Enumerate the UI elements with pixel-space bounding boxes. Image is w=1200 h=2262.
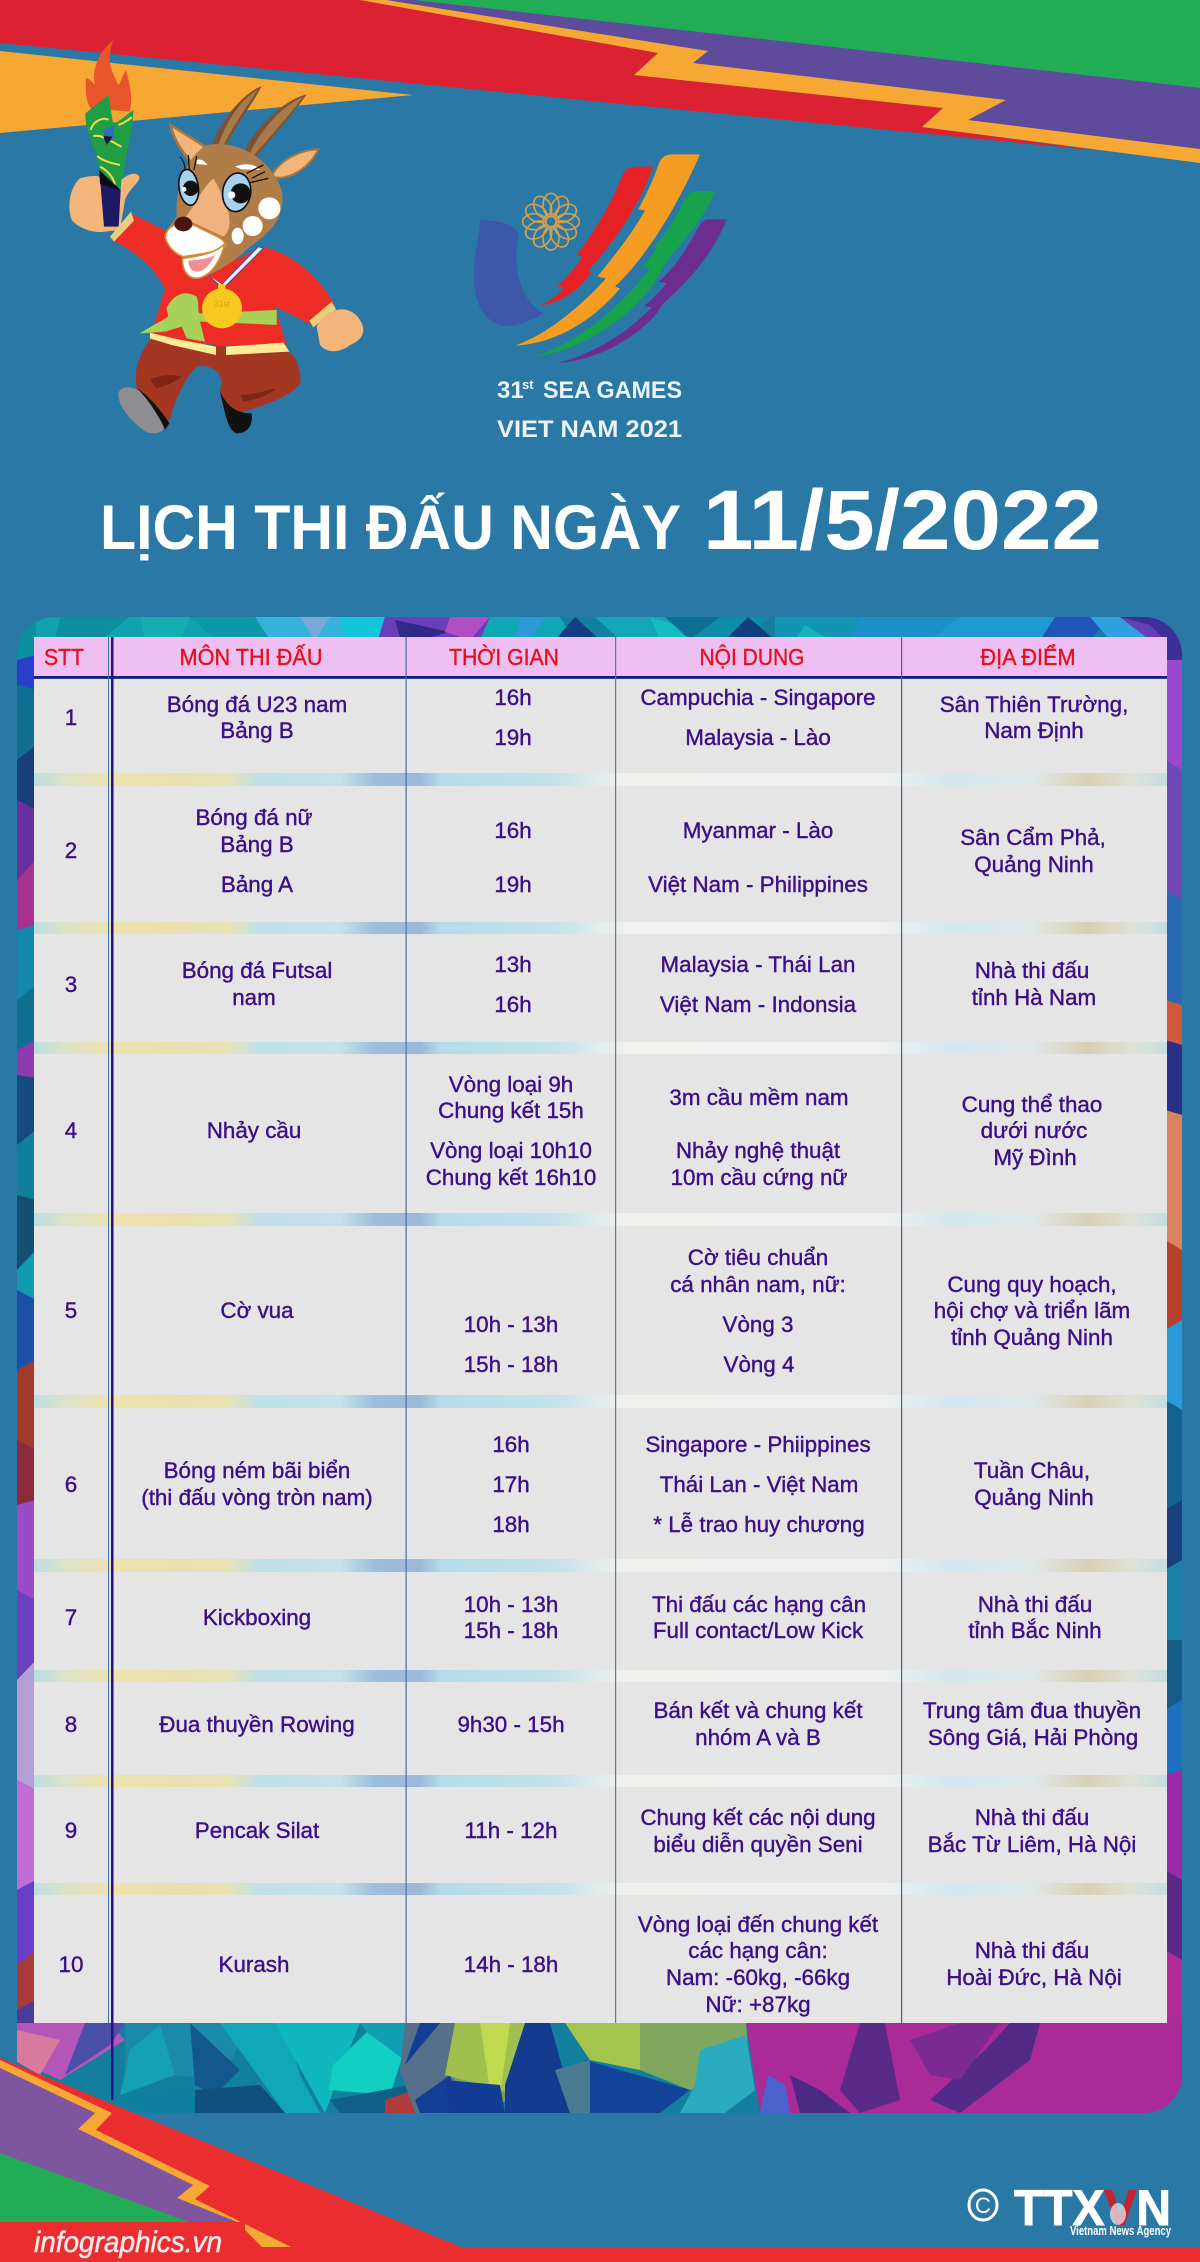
row 3: Việt Nam - Indonsia (660, 992, 857, 1017)
sash (140, 293, 277, 342)
table header labels (44, 643, 1076, 670)
title (100, 473, 1102, 567)
row 5: hội chợ và triển lãm (934, 1298, 1130, 1323)
muzzle (165, 223, 226, 257)
row 9: 9 (65, 1818, 77, 1843)
thick column rule in panel (111, 2023, 114, 2100)
row 5: Cờ tiêu chuẩn (688, 1245, 828, 1270)
row 10: 14h - 18h (464, 1952, 558, 1977)
medal: 31st (214, 300, 230, 309)
row 8 (65, 1698, 1141, 1750)
table background (34, 637, 1167, 2023)
agency name: Vietnam News Agency (1070, 2224, 1171, 2238)
row 1: Nam Định (984, 718, 1084, 743)
row 9: Chung kết các nội dung (640, 1805, 876, 1830)
logo text line 1: SEA GAMES (543, 377, 682, 404)
row 4: Chung kết 16h10 (426, 1165, 596, 1190)
row 4: 3m cầu mềm nam (669, 1085, 849, 1110)
row 4: Mỹ Đình (993, 1145, 1077, 1170)
table header background (34, 637, 1167, 676)
row 5: tỉnh Quảng Ninh (951, 1325, 1113, 1350)
row 1: 16h (494, 685, 532, 710)
table header labels: STT (44, 644, 84, 670)
row 7: Nhà thi đấu (978, 1592, 1092, 1617)
row 8: nhóm A và B (695, 1725, 821, 1750)
copyright symbol: C (975, 2193, 991, 2218)
row 4: Cung thể thao (962, 1092, 1102, 1117)
table header labels: NỘI DUNG (700, 643, 804, 670)
row 1: Sân Thiên Trường, (940, 692, 1128, 717)
logo: TTXVN news agency (969, 2180, 1171, 2238)
row 5: cá nhân nam, nữ: (670, 1272, 846, 1297)
row 3: tỉnh Hà Nam (972, 985, 1096, 1010)
row 6: Bóng ném bãi biển (164, 1458, 350, 1483)
row 8: Sông Giá, Hải Phòng (928, 1725, 1138, 1750)
row 5: Vòng 3 (723, 1312, 793, 1337)
row 8: 9h30 - 15h (457, 1712, 565, 1737)
row 4: Vòng loại 10h10 (430, 1138, 592, 1163)
row 3: 3 (65, 972, 77, 997)
row 6: Singapore - Phiippines (645, 1432, 871, 1457)
row 10: Hoài Đức, Hà Nội (946, 1965, 1122, 1990)
row 10: Vòng loại đến chung kết (638, 1912, 879, 1937)
row 2: Bóng đá nữ (195, 805, 313, 830)
row 3: Nhà thi đấu (975, 958, 1089, 983)
row 6: 17h (492, 1472, 530, 1497)
row 7: Full contact/Low Kick (653, 1618, 864, 1643)
row 3: 13h (494, 952, 532, 977)
row 10: Nhà thi đấu (975, 1938, 1089, 1963)
row 9: Bắc Từ Liêm, Hà Nội (928, 1832, 1136, 1857)
row 7: 7 (65, 1605, 77, 1630)
shirt (112, 214, 335, 352)
row 6: Tuần Châu, (974, 1458, 1090, 1483)
logo text line 1: 31 (497, 377, 524, 404)
row 7: Thi đấu các hạng cân (652, 1592, 866, 1617)
torch handle (99, 170, 121, 227)
table header labels: MÔN THI ĐẤU (180, 643, 322, 670)
column rules (108, 637, 902, 2023)
TTXVN wordmark: TTXVN (1014, 2180, 1171, 2236)
pants and shoes (118, 340, 301, 433)
white spots (258, 197, 280, 219)
row 6 (65, 1432, 1094, 1537)
row 1 (65, 685, 1128, 750)
row 5: Vòng 4 (724, 1352, 794, 1377)
mascot: deer holding torch (69, 40, 363, 433)
row 5 (65, 1245, 1130, 1377)
logo text line 1: st (522, 377, 534, 392)
row 7: Kickboxing (203, 1605, 311, 1630)
row 3: nam (232, 985, 276, 1010)
title: 11/5/2022 (703, 473, 1102, 567)
row 10: các hạng cân: (688, 1938, 828, 1963)
row 8: Trung tâm đua thuyền (923, 1698, 1141, 1723)
row 3: Malaysia - Thái Lan (661, 952, 855, 977)
row 5: 15h - 18h (464, 1352, 558, 1377)
row 7: 15h - 18h (464, 1618, 558, 1643)
row 6: Quảng Ninh (974, 1485, 1094, 1510)
row 6: * Lễ trao huy chương (653, 1512, 865, 1537)
right hand (317, 309, 363, 351)
row 10 (59, 1912, 1122, 2017)
row 8: Bán kết và chung kết (653, 1698, 863, 1723)
row 5: Cung quy hoạch, (947, 1272, 1117, 1297)
row 4: Nhảy nghệ thuật (676, 1138, 841, 1163)
row 4: 4 (65, 1118, 77, 1143)
row 1: 19h (494, 725, 532, 750)
medal (202, 247, 263, 328)
row 5: Cờ vua (220, 1298, 294, 1323)
head (165, 144, 283, 278)
ears and horns (171, 86, 318, 178)
row 7: tỉnh Bắc Ninh (968, 1618, 1102, 1643)
row 3: 16h (494, 992, 532, 1017)
row 6: 6 (65, 1472, 77, 1497)
row 1: Bảng B (220, 718, 294, 743)
torch flame (86, 40, 131, 112)
emblem shapes (474, 154, 727, 363)
row 1: 1 (65, 705, 77, 730)
row 8: 8 (65, 1712, 77, 1737)
row 8: Đua thuyền Rowing (159, 1712, 355, 1737)
bottom banner: coloured ribbons (0, 2058, 1200, 2262)
table header labels: ĐỊA ĐIỂM (980, 643, 1076, 670)
panel mosaic background (17, 617, 1182, 2113)
row 7 (65, 1592, 1102, 1643)
logo: 31st SEA Games emblem (474, 154, 727, 443)
top banner: coloured ribbons (0, 0, 1200, 163)
row 9 (65, 1805, 1136, 1857)
row 2: Sân Cẩm Phả, (960, 825, 1106, 850)
table header labels: THỜI GIAN (449, 644, 559, 670)
row 7: 10h - 13h (464, 1592, 558, 1617)
row 10: Nam: -60kg, -66kg (666, 1965, 850, 1990)
row 2: Myanmar - Lào (683, 818, 833, 843)
eyes (177, 155, 268, 213)
rosette (522, 193, 580, 250)
row 2 (65, 805, 1106, 897)
bottom band (17, 2023, 125, 2080)
row 10: Nữ: +87kg (705, 1992, 811, 2017)
row 6: Thái Lan - Việt Nam (660, 1472, 858, 1497)
torch head (85, 95, 133, 191)
row 4: 10m cầu cứng nữ (671, 1165, 847, 1190)
source: infographics.vn: infographics.vn (34, 2226, 222, 2259)
row 4 (65, 1072, 1102, 1190)
row 3: Bóng đá Futsal (182, 958, 332, 983)
row 5: 5 (65, 1298, 77, 1323)
row 2: 2 (65, 838, 77, 863)
row 10: Kurash (219, 1952, 289, 1977)
row 2: Quảng Ninh (974, 852, 1094, 877)
row 9: Pencak Silat (195, 1818, 320, 1843)
row 9: Nhà thi đấu (975, 1805, 1089, 1830)
row 2: Bảng A (221, 872, 293, 897)
row 1: Bóng đá U23 nam (167, 692, 347, 717)
row 2: Bảng B (220, 832, 294, 857)
row 10: 10 (59, 1952, 83, 1977)
row 2: 16h (494, 818, 532, 843)
row separators (34, 773, 1167, 1895)
row 3 (65, 952, 1096, 1017)
row 4: Vòng loại 9h (449, 1072, 573, 1097)
title: LỊCH THI ĐẤU NGÀY (100, 492, 681, 563)
row 9: biểu diễn quyền Seni (653, 1832, 863, 1857)
logo text line 2: VIET NAM 2021 (497, 416, 682, 443)
row 2: 19h (494, 872, 532, 897)
row 1: Malaysia - Lào (685, 725, 831, 750)
left strip (17, 622, 36, 660)
row 4: Chung kết 15h (438, 1098, 584, 1123)
hand holding torch (69, 174, 139, 232)
row 1: Campuchia - Singapore (640, 685, 876, 710)
row 6: 16h (492, 1432, 530, 1457)
copyright symbol (969, 2190, 997, 2220)
row 6: 18h (492, 1512, 530, 1537)
globe mark (1110, 2203, 1126, 2225)
right strip (1165, 660, 1182, 770)
row 5: 10h - 13h (464, 1312, 558, 1337)
panel: schedule table (17, 617, 1182, 2113)
row 4: dưới nước (981, 1118, 1087, 1143)
row 4: Nhảy cầu (207, 1118, 301, 1143)
row 6: (thi đấu vòng tròn nam) (141, 1485, 373, 1510)
row 9: 11h - 12h (465, 1818, 557, 1843)
row 2: Việt Nam - Philippines (648, 872, 868, 897)
